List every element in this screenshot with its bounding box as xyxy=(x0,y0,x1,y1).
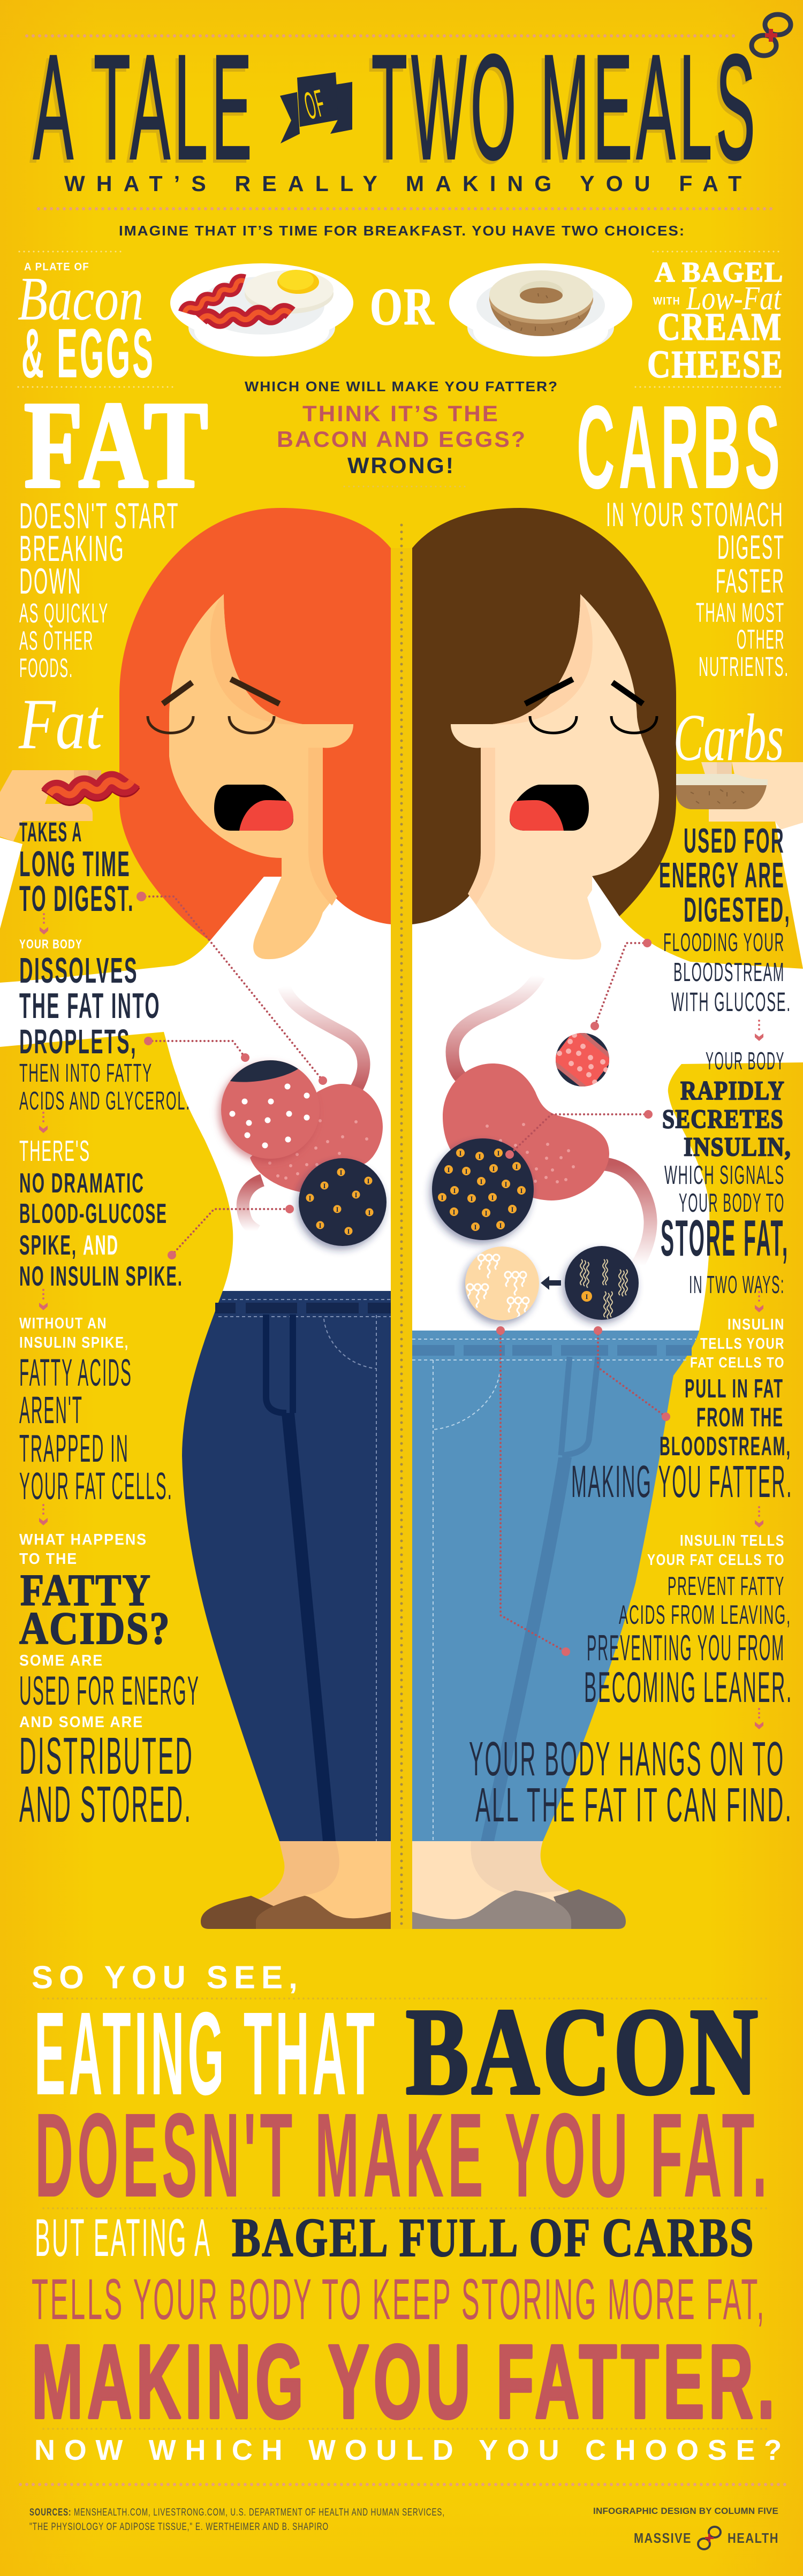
diagram: left stomach xyxy=(221,986,387,1246)
icon: bacon strip in hand xyxy=(49,778,133,800)
mouth left xyxy=(214,785,293,831)
question block: BACON AND EGGS? xyxy=(277,427,527,452)
magnified circle: insulin secretion: I xyxy=(452,1208,456,1216)
header rule lines xyxy=(18,36,783,487)
text block: what happens to fatty acids: AND SOME ARE xyxy=(19,1714,143,1731)
credits and brand logo: MASSIVE xyxy=(634,2530,692,2546)
magnified circle: insulin secretion: I xyxy=(447,1166,450,1174)
callout lines: left xyxy=(137,892,327,1259)
credits and brand logo: HEALTH xyxy=(728,2530,779,2546)
question block: WHICH ONE WILL MAKE YOU FATTER? xyxy=(245,378,558,394)
heading: fat: FAT xyxy=(24,376,211,514)
text block: takes a long time to digest: TAKES A xyxy=(19,817,82,847)
magnified circle: no insulin spike: I xyxy=(336,1205,339,1213)
title ribbon: of: OF xyxy=(300,81,329,128)
text block: fat doesn't start breaking down xyxy=(19,496,179,683)
icon: half bagel in hand xyxy=(676,774,768,809)
face right xyxy=(451,594,659,960)
label: or: OR xyxy=(370,278,435,336)
text block: what happens to fatty acids: WHAT HAPPENS xyxy=(19,1531,147,1548)
sleeve left xyxy=(0,838,22,929)
conclusion block: NOW WHICH WOULD YOU CHOOSE? xyxy=(34,2434,784,2466)
text block: takes a long time to digest: LONG TIME xyxy=(19,844,131,884)
text block: what happens to fatty acids: ACIDS? xyxy=(19,1602,171,1654)
magnified circle: insulin secretion: I xyxy=(470,1195,473,1203)
text block: no insulin spike: THERE'S xyxy=(19,1134,90,1167)
esophagus left xyxy=(284,986,364,1089)
jeans left xyxy=(182,1291,391,1841)
text block: prevent fatty acids from leaving xyxy=(584,1532,793,1712)
credits and brand logo: INFOGRAPHIC DESIGN BY COLUMN FIVE xyxy=(593,2506,779,2516)
text block: fatty acids not trapped: AREN'T xyxy=(19,1389,83,1432)
figure: center divider xyxy=(391,525,412,1930)
text block: takes a long time to digest: TO DIGEST. xyxy=(19,878,134,919)
figure: right woman (carbs) xyxy=(412,508,803,1929)
text block: carbs digest faster xyxy=(606,496,789,682)
text block: fatty acids not trapped: WITHOUT AN xyxy=(19,1315,107,1332)
legs and shoes left xyxy=(214,1841,391,1929)
sleeve right xyxy=(775,806,803,969)
icon: plate of bacon and eggs xyxy=(170,263,353,356)
magnified circle: insulin secretion: I xyxy=(465,1167,468,1175)
text: DISTRIBUTED xyxy=(19,1727,194,1785)
text block: fatty acids not trapped: TRAPPED IN xyxy=(19,1427,129,1470)
title: A TALE xyxy=(33,24,256,190)
magnified circle: insulin secretion: I xyxy=(441,1194,444,1202)
magnified circle: fat droplets xyxy=(221,1049,320,1159)
text block: what happens to fatty acids xyxy=(19,1531,200,1833)
text block: no insulin spike: NO INSULIN SPIKE. xyxy=(19,1261,183,1292)
icon: brand infinity logo xyxy=(752,14,791,56)
text block: dissolves the fat: DROPLETS, xyxy=(19,1022,137,1061)
conclusion block xyxy=(32,1959,784,2466)
text block: fatty acids not trapped: FATTY ACIDS xyxy=(19,1352,132,1394)
title ribbon: of xyxy=(280,72,352,143)
magnified circle: no insulin spike: I xyxy=(319,1221,322,1229)
label: bacon and eggs: Bacon xyxy=(18,265,143,333)
magnified circle: insulin secretion: I xyxy=(478,1152,481,1160)
magnified circle: blood vessel with glucose xyxy=(556,1033,609,1086)
jeans right xyxy=(412,1331,699,1841)
question block: WRONG! xyxy=(347,453,455,478)
arm right xyxy=(701,762,803,830)
arm left xyxy=(0,770,101,841)
script label: fat: Fat xyxy=(18,685,104,764)
magnified circle: fatty acids and insulin xyxy=(565,1246,639,1320)
text block: dissolves the fat xyxy=(19,937,191,1115)
question block xyxy=(245,378,558,478)
sources: "THE PHYSIOLOGY OF ADIPOSE TISSUE," E. WERTHEIMER AND B. SHAPIRO xyxy=(29,2521,329,2533)
text block: what happens to fatty acids: TO THE xyxy=(19,1551,78,1568)
text block: fatty acids not trapped xyxy=(19,1315,173,1508)
magnified circle: insulin secretion: I xyxy=(499,1221,502,1229)
mouth right xyxy=(510,785,589,831)
magnified circle: no insulin spike: I xyxy=(367,1177,370,1185)
text block: dissolves the fat: YOUR BODY xyxy=(19,937,82,952)
text block: rapidly secretes insulin: RAPIDLY xyxy=(680,1075,785,1105)
conclusion block: BUT EATING A xyxy=(35,2208,211,2267)
text block: fat doesn't start breaking down: AS OTHER xyxy=(19,626,94,656)
text block: dissolves the fat: DISSOLVES xyxy=(19,951,138,991)
text block: no insulin spike: SPIKE, xyxy=(19,1230,77,1261)
stomach left xyxy=(250,1084,383,1194)
text block: no insulin spike: BLOOD-GLUCOSE xyxy=(19,1198,168,1229)
magnified circle: insulin secretion: I xyxy=(491,1194,494,1202)
label: bacon and eggs: A PLATE OF xyxy=(24,261,89,273)
label: bacon and eggs xyxy=(18,261,155,392)
footer rule xyxy=(20,2483,786,2486)
text block: fatty acids not trapped: INSULIN SPIKE, xyxy=(19,1334,129,1351)
magnified circle: no insulin spike: I xyxy=(368,1209,371,1217)
diagram: right stomach xyxy=(432,975,650,1321)
text block: pull in fat: INSULIN xyxy=(728,1316,785,1333)
text block: fat doesn't start breaking down: AS QUICKLY xyxy=(19,598,109,628)
text block: fat doesn't start breaking down: BREAKING xyxy=(19,528,125,569)
text block: dissolves the fat: ACIDS AND GLYCEROL. xyxy=(19,1087,191,1115)
magnified circle: insulin secretion: I xyxy=(492,1165,495,1173)
subtitle: WHAT’S REALLY MAKING YOU FAT xyxy=(64,171,743,196)
shirt left xyxy=(0,856,391,1291)
stomach specks right xyxy=(486,1123,575,1183)
text block: rapidly secretes insulin xyxy=(661,1047,791,1298)
text block: takes a long time to digest xyxy=(19,817,134,919)
text block: no insulin spike: AND xyxy=(83,1230,119,1261)
label: bagel with low-fat cream cheese: Low-Fat xyxy=(686,280,782,317)
icon: plate with bagel xyxy=(449,263,632,356)
text block: dissolves the fat: THE FAT INTO xyxy=(19,986,161,1026)
intro line: IMAGINE THAT IT’S TIME FOR BREAKFAST. YOU HAVE TWO CHOICES: xyxy=(119,223,685,239)
magnified circle: insulin secretion: I xyxy=(504,1180,507,1188)
magnified circle: insulin secretion: I xyxy=(459,1149,462,1157)
text block: what happens to fatty acids: SOME ARE xyxy=(19,1652,103,1669)
text block: used for energy flooding bloodstream xyxy=(659,821,791,1017)
conclusion block: SO YOU SEE, xyxy=(32,1959,300,1995)
magnified circle: fat cell xyxy=(465,1247,539,1321)
text block: no insulin spike xyxy=(19,1134,183,1292)
lower intestine right xyxy=(605,1164,650,1266)
magnified circle: no insulin spike: I xyxy=(323,1182,326,1190)
text: YOUR FAT CELLS. xyxy=(19,1465,173,1508)
stomach specks left xyxy=(268,1119,368,1180)
text block: your body hangs on xyxy=(469,1732,793,1832)
figure: left woman (fat) xyxy=(0,508,391,1929)
sources: SOURCES: MENSHEALTH.COM, LIVESTRONG.COM, U.S. DEPARTMENT OF HEALTH AND HUMAN SERVICES, xyxy=(29,2507,445,2518)
magnified circle: insulin secretion: I xyxy=(480,1177,483,1186)
magnified circle: fatty acids and insulin: I xyxy=(585,1293,588,1301)
magnified circle: insulin secretion: I xyxy=(484,1209,488,1217)
stomach right xyxy=(443,1063,609,1200)
arrow: into fat cell xyxy=(541,1276,561,1290)
callout lines: right xyxy=(496,939,670,1656)
eyes and brows left xyxy=(148,679,279,733)
magnified circle: no insulin spike xyxy=(299,1158,387,1246)
lower intestine left xyxy=(243,1180,262,1231)
magnified circle: no insulin spike: I xyxy=(339,1168,343,1176)
text block: fat doesn't start breaking down: DOESN'T START xyxy=(19,496,179,536)
magnified circle: insulin secretion: I xyxy=(515,1162,518,1171)
magnified circle: insulin secretion: I xyxy=(520,1187,523,1195)
magnified circle: insulin secretion: I xyxy=(453,1187,456,1195)
magnified circle: no insulin spike: I xyxy=(347,1227,350,1235)
text block: dissolves the fat: THEN INTO FATTY xyxy=(19,1059,153,1088)
flow arrows xyxy=(39,914,763,1729)
eyes and brows right xyxy=(525,679,657,733)
esophagus right xyxy=(452,975,539,1077)
text block: fat doesn't start breaking down: FOODS. xyxy=(19,653,73,683)
label: bagel with low-fat cream cheese xyxy=(647,257,784,386)
magnified circle: insulin secretion: I xyxy=(497,1149,500,1157)
label: bagel with low-fat cream cheese: WITH xyxy=(653,295,680,307)
sources xyxy=(29,2507,445,2533)
credits and brand logo xyxy=(593,2506,779,2549)
face left xyxy=(169,594,353,959)
hair right xyxy=(412,508,676,924)
text block: pull in fat xyxy=(571,1316,793,1507)
magnified circle: insulin secretion xyxy=(432,1138,534,1240)
text block: what happens to fatty acids: FATTY xyxy=(20,1566,151,1615)
magnified circle: insulin secretion: I xyxy=(511,1205,514,1213)
text: USED FOR ENERGY xyxy=(19,1668,200,1714)
question block: THINK IT’S THE xyxy=(302,401,499,426)
text: & EGGS xyxy=(21,314,155,392)
text block: fat doesn't start breaking down: DOWN xyxy=(19,561,82,602)
magnified circle: no insulin spike: I xyxy=(308,1194,312,1202)
text: AND STORED. xyxy=(19,1776,192,1833)
shirt right xyxy=(412,856,803,1331)
hair left xyxy=(119,508,391,941)
label: bagel with low-fat cream cheese: A BAGEL xyxy=(655,257,784,288)
magnified circle: insulin secretion: I xyxy=(474,1223,477,1231)
text block: no insulin spike: NO DRAMATIC xyxy=(19,1168,145,1199)
magnified circle: no insulin spike: I xyxy=(354,1191,358,1199)
legs and shoes right xyxy=(412,1841,569,1929)
